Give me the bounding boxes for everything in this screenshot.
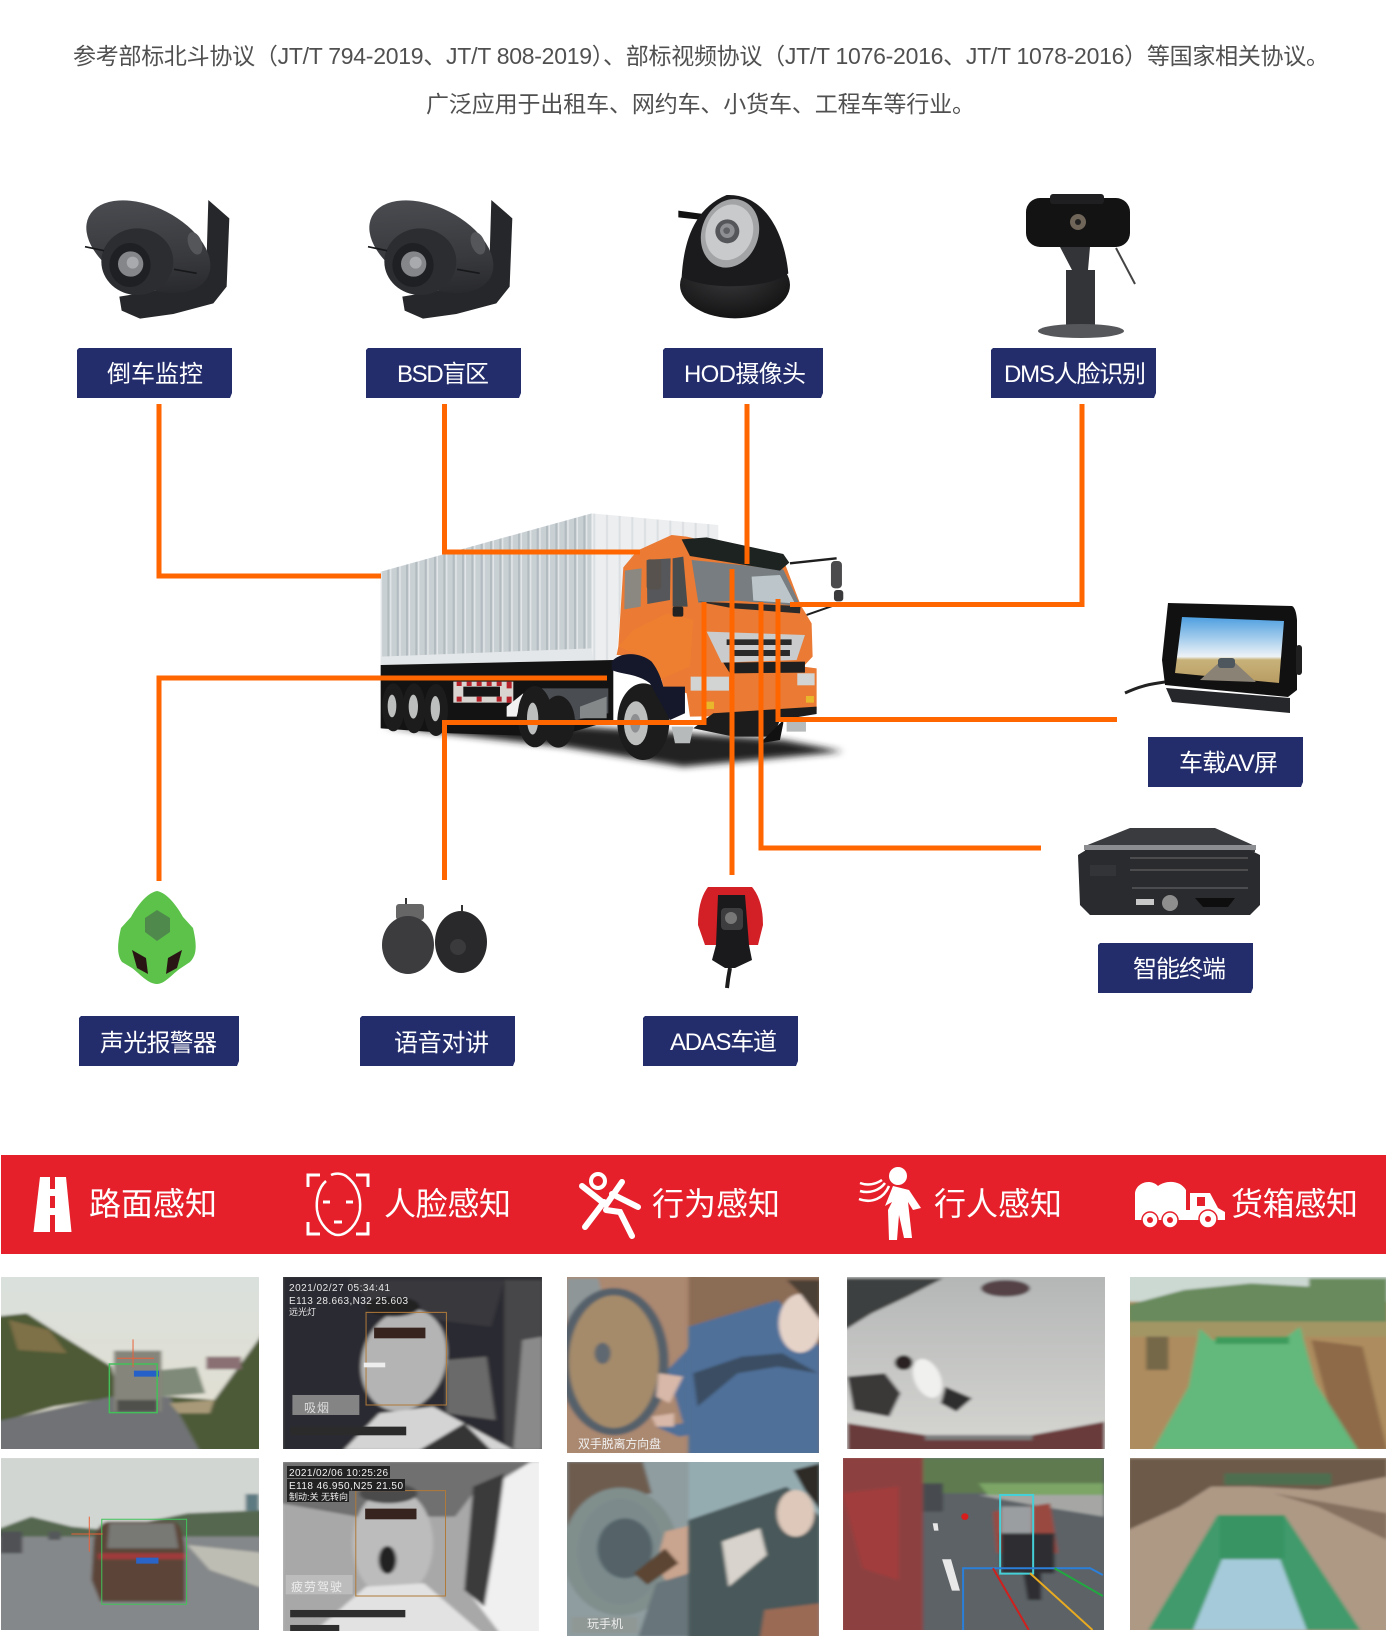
- truck: [381, 513, 843, 767]
- photo captions: smoking: 远光灯: [289, 1306, 316, 1317]
- icon: reversing camera: [71, 181, 229, 319]
- label: 智能终端: 智能终端: [1133, 956, 1226, 983]
- photo: road minivan: [0, 1457, 268, 1633]
- photo captions: smoking: [289, 1283, 408, 1415]
- icon: green alarm: [118, 891, 196, 984]
- icon: dump truck: [1135, 1182, 1225, 1228]
- photo captions: smoking: 2021/02/27 05:34:41: [289, 1283, 390, 1294]
- label: 倒车监控: [77, 348, 232, 398]
- label: ADAS车道: [643, 1016, 798, 1066]
- photo caption: using phone: 玩手机: [587, 1617, 623, 1631]
- red feature banner: [1, 1155, 1386, 1254]
- label: BSD盲区: [366, 348, 521, 398]
- intro text: 广泛应用于出租车、网约车、小货车、工程车等行业。: [426, 91, 975, 117]
- label: 车载AV屏: 车载AV屏: [1179, 750, 1278, 777]
- label: 倒车监控: 倒车监控: [107, 361, 203, 388]
- label: 声光报警器: [79, 1016, 239, 1066]
- intro text: [73, 43, 1329, 117]
- label: DMS人脸识别: DMS人脸识别: [1004, 361, 1146, 388]
- text: 行人感知: 行人感知: [934, 1186, 1062, 1222]
- icon: intercom speakers: [382, 898, 487, 974]
- label: ADAS车道: ADAS车道: [670, 1029, 777, 1056]
- label: 车载AV屏: [1148, 737, 1303, 787]
- label: 语音对讲: [360, 1016, 515, 1066]
- photo captions: smoking: 吸烟: [304, 1401, 329, 1415]
- photo: road truck: [0, 1273, 268, 1453]
- sun visor: [682, 537, 789, 571]
- photo: cargo box, empty: [1126, 1275, 1389, 1452]
- photo: tricycle detection: [840, 1457, 1108, 1633]
- photo captions: yawning: 制动:关 无转向: [289, 1491, 348, 1502]
- cab: [617, 535, 817, 717]
- photo: hands off wheel: [562, 1275, 822, 1457]
- label: 语音对讲: 语音对讲: [394, 1030, 489, 1057]
- text: 路面感知: 路面感知: [89, 1186, 217, 1222]
- grille: [707, 632, 805, 663]
- photo captions: yawning: 2021/02/06 10:25:26: [289, 1468, 388, 1479]
- icon: AV monitor: [1125, 603, 1302, 713]
- label: HOD摄像头: HOD摄像头: [684, 361, 806, 388]
- photo: using phone: [562, 1460, 822, 1638]
- intro text: 参考部标北斗协议（JT/T 794-2019、JT/T 808-2019）、部标视频协议（JT/T 1076-2016、JT/T 1078-2016）等国家相关协议。: [73, 43, 1329, 69]
- text: 货箱感知: 货箱感知: [1231, 1186, 1358, 1222]
- label: 声光报警器: 声光报警器: [100, 1030, 217, 1057]
- icon: face recognition: [308, 1174, 368, 1235]
- label: DMS人脸识别: [991, 348, 1156, 398]
- windows: [624, 568, 642, 609]
- icon: road: [34, 1177, 72, 1232]
- icon: ADAS camera: [698, 887, 763, 988]
- icon: pedestrian with sensor waves: [859, 1167, 921, 1240]
- label: HOD摄像头: [663, 348, 823, 398]
- icon: seat belt driver: [582, 1174, 638, 1236]
- wheels: [382, 683, 669, 760]
- label: 智能终端: [1098, 943, 1253, 993]
- photo captions: yawning: 疲劳驾驶: [291, 1579, 342, 1594]
- lights and bumper: [691, 677, 729, 691]
- photo: cargo box, loaded: [1126, 1457, 1389, 1633]
- container: [381, 513, 592, 665]
- photo captions: smoking: E113 28.663,N32 25.603: [289, 1296, 408, 1307]
- photo: driver yawning: [281, 1460, 540, 1633]
- label: BSD盲区: BSD盲区: [397, 361, 489, 388]
- connector lines: [159, 404, 1117, 881]
- icon: DMS camera: [1026, 194, 1135, 338]
- icon: HOD dome camera: [678, 191, 790, 318]
- text: 行为感知: 行为感知: [652, 1186, 780, 1222]
- photo: pedestrian: [845, 1275, 1108, 1452]
- text: 人脸感知: 人脸感知: [384, 1186, 511, 1222]
- photo captions: yawning: [287, 1466, 405, 1594]
- icon: BSD camera: [354, 181, 512, 319]
- photo captions: yawning: E118 46.950,N25 21.50: [289, 1481, 403, 1492]
- photo: driver smoking: [281, 1275, 545, 1452]
- chassis: [381, 660, 613, 737]
- truck shadow: [382, 727, 843, 767]
- mirror: [790, 558, 837, 563]
- photo caption: hands off wheel: 双手脱离方向盘: [578, 1436, 661, 1451]
- icon: smart terminal: [1078, 828, 1260, 915]
